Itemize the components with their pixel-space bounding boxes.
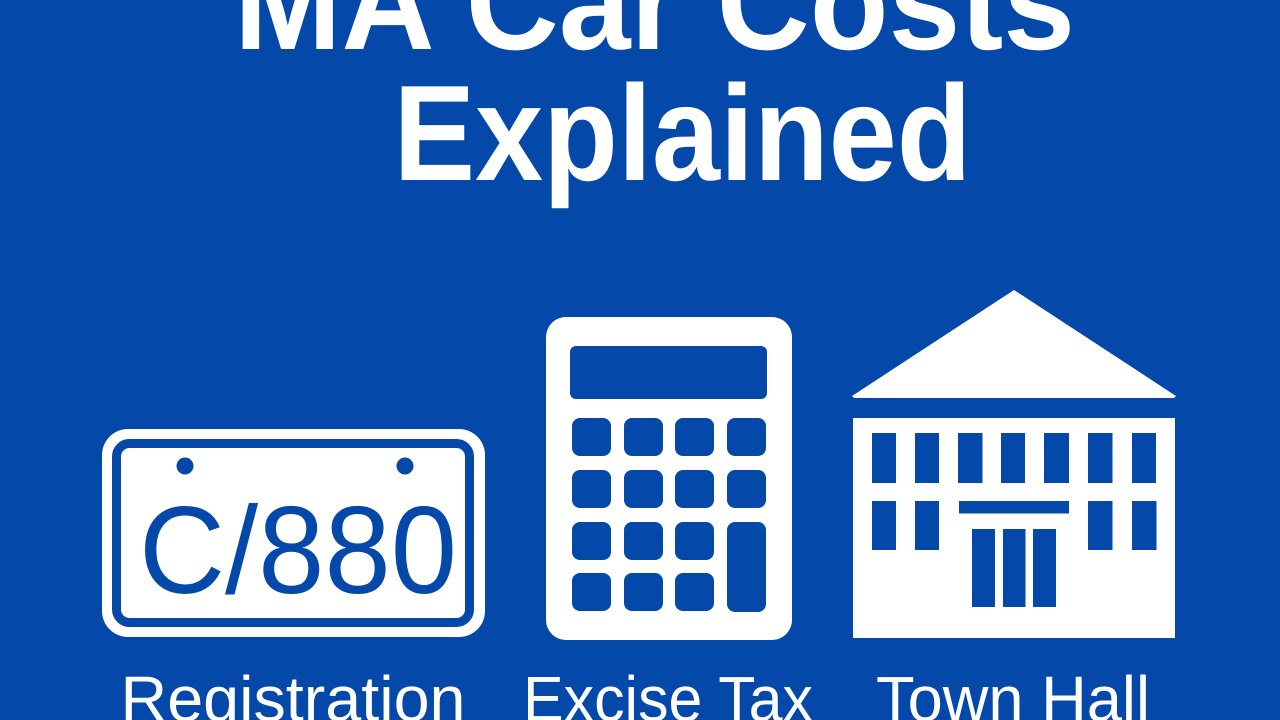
icon: town hall [852, 290, 1176, 638]
icon: license plate: C/880 [139, 482, 457, 620]
title [234, 0, 1075, 209]
icon: calculator [546, 317, 792, 640]
title: Explained [394, 57, 972, 209]
icon: license plate [102, 429, 485, 637]
